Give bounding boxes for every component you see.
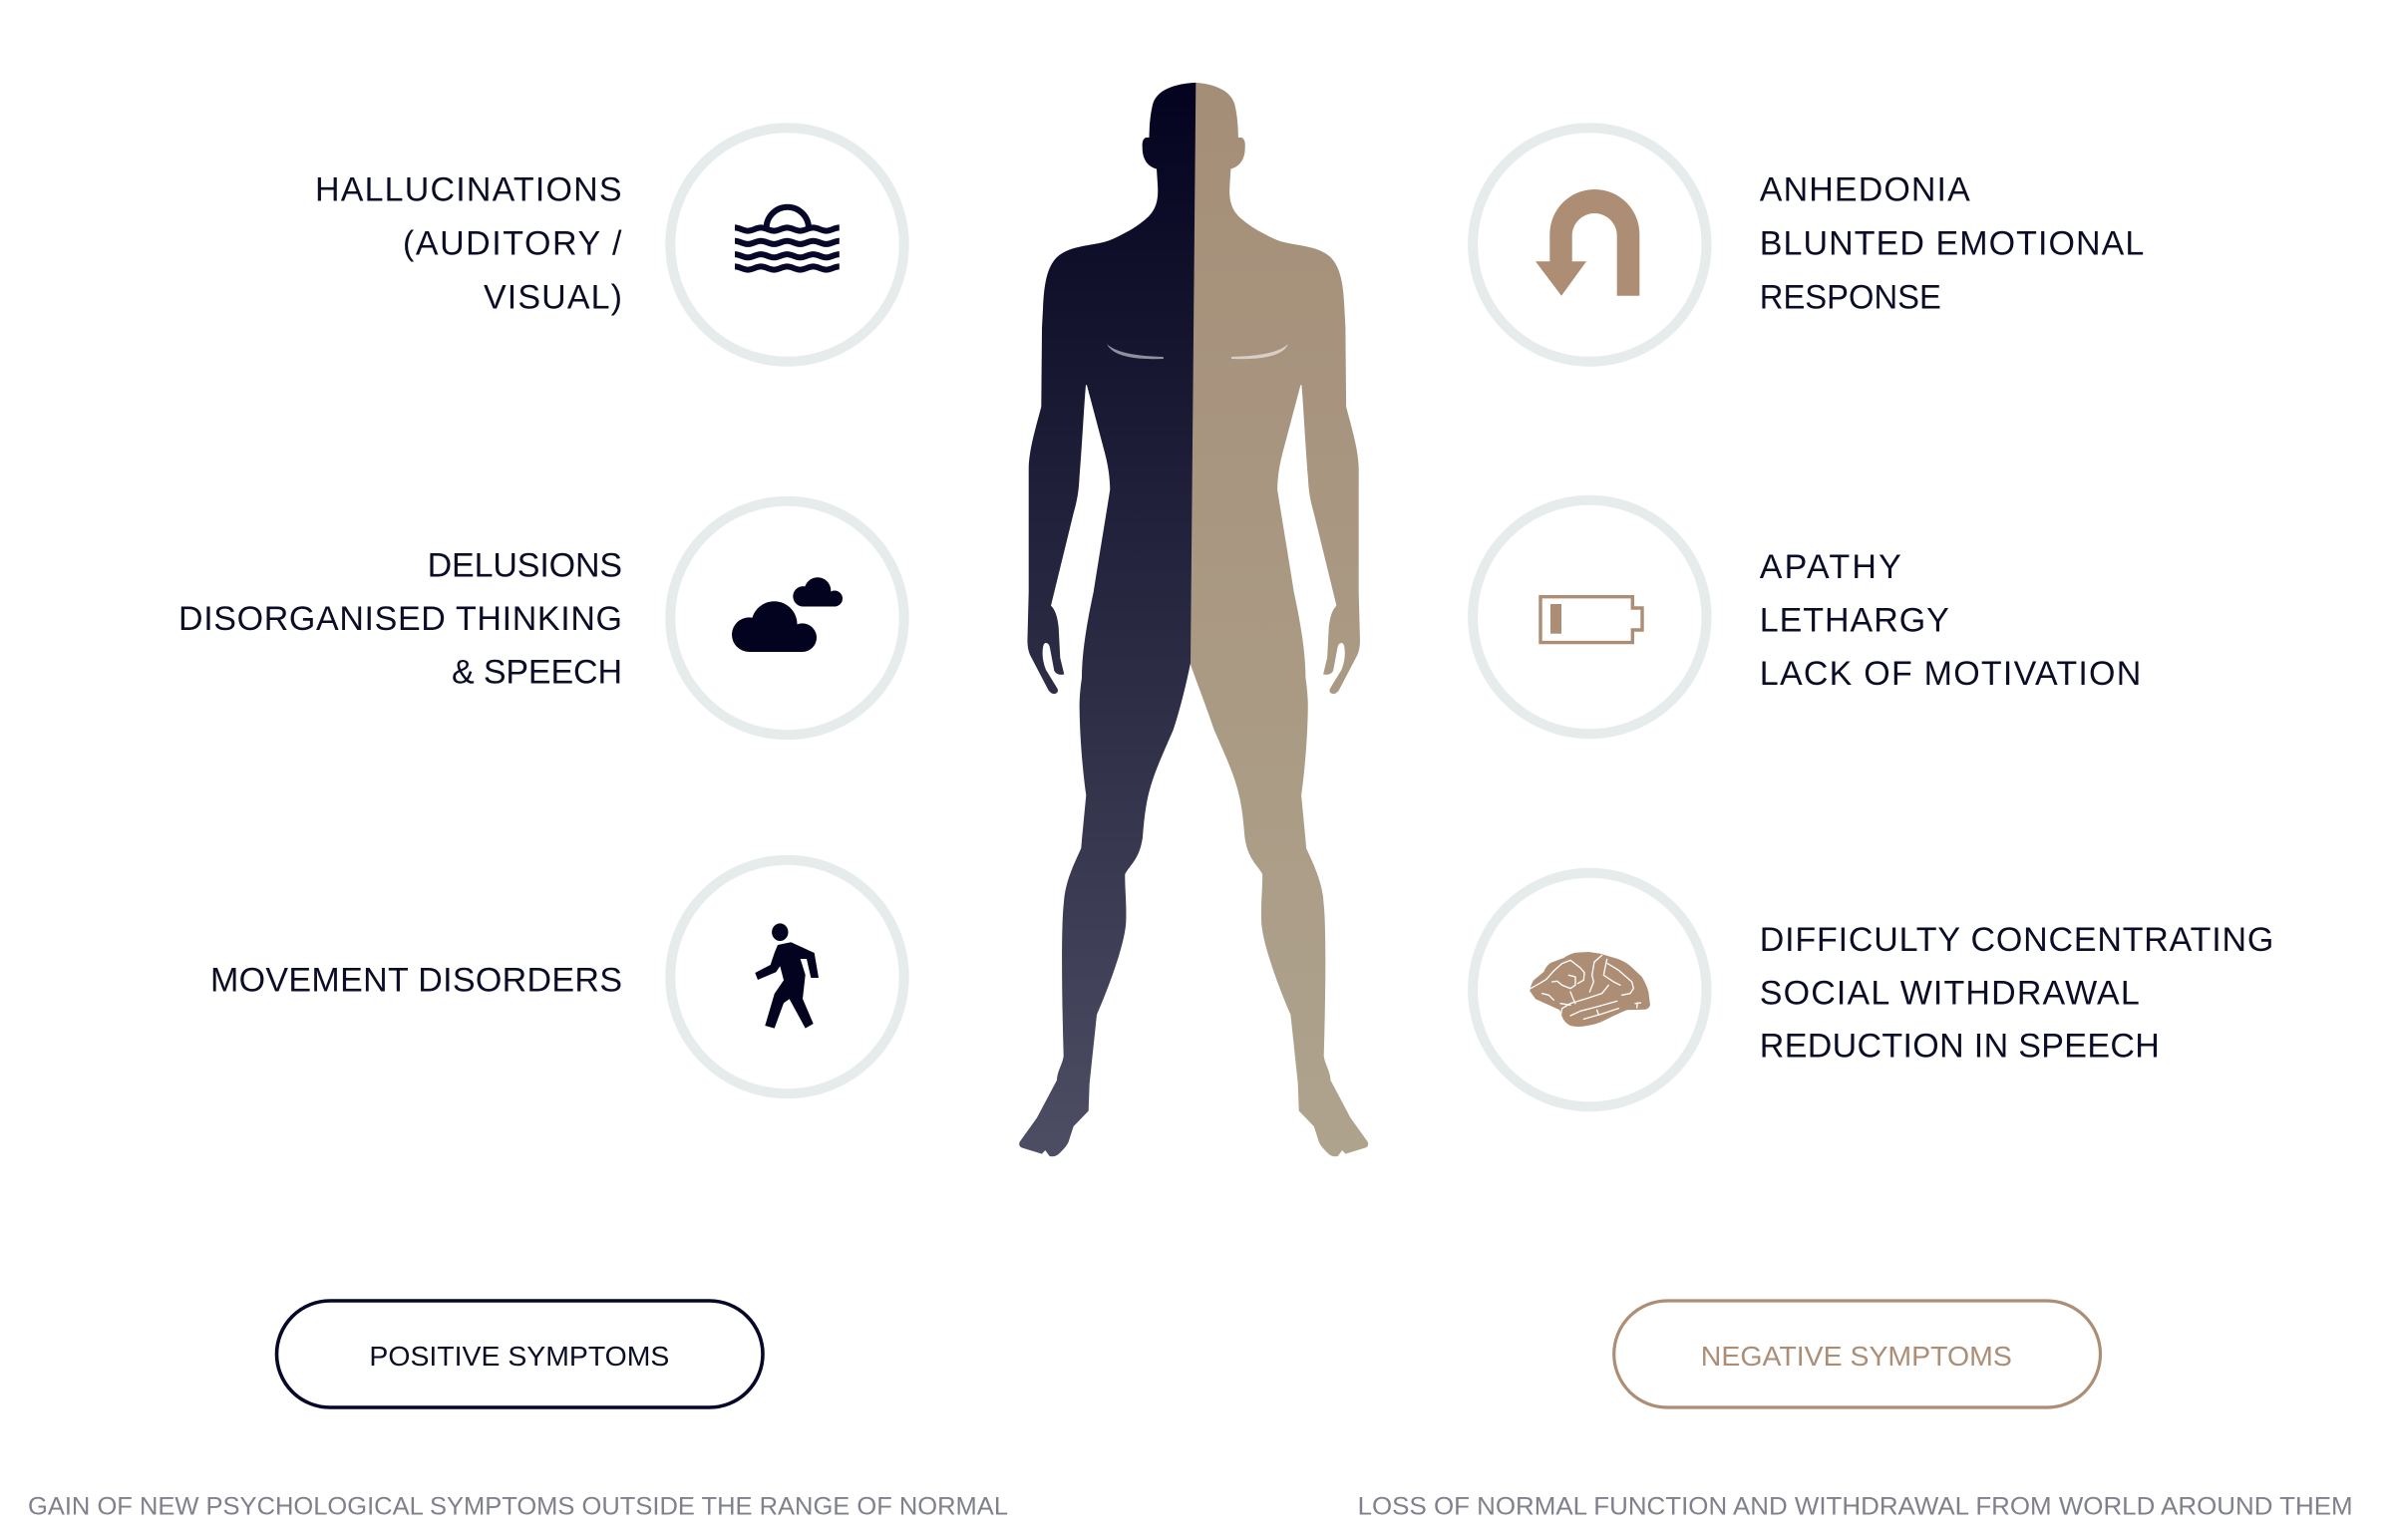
panel: hallucinations	[315, 128, 904, 362]
panel: movement disorders	[210, 860, 904, 1093]
icon: walking person	[755, 923, 819, 1029]
label: difficulty concentrating	[1760, 921, 2273, 1065]
label: hallucinations: HALLUCINATIONS	[315, 171, 622, 209]
label: difficulty concentrating: REDUCTION IN SPEECH	[1760, 1027, 2160, 1065]
right half of body	[1190, 83, 1368, 1156]
label: apathy	[1760, 548, 2141, 693]
icon ring: movement disorders	[670, 860, 904, 1093]
label: apathy: LETHARGY	[1760, 601, 1949, 639]
icon: u-turn arrow	[1536, 189, 1639, 296]
panel: apathy	[1473, 500, 2141, 734]
panel: delusions	[178, 501, 904, 735]
label: apathy: APATHY	[1760, 548, 1901, 586]
label: delusions	[178, 546, 622, 692]
left chest line	[1107, 344, 1164, 359]
label: anhedonia	[1760, 171, 2144, 316]
panel: difficulty concentrating	[1473, 873, 2273, 1106]
icon: clouds	[732, 577, 843, 652]
icon ring: delusions	[670, 501, 904, 735]
icon ring: anhedonia	[1473, 128, 1707, 362]
icon ring: hallucinations	[670, 128, 904, 362]
label: delusions: DISORGANISED THINKING	[178, 600, 622, 638]
label: hallucinations	[315, 171, 622, 316]
pill: negative symptoms	[1614, 1301, 2100, 1407]
legend: positive symptoms	[28, 1301, 1008, 1520]
pill: positive symptoms: POSITIVE SYMPTOMS	[369, 1341, 669, 1372]
left half of body	[1019, 83, 1196, 1156]
caption: positive: GAIN OF NEW PSYCHOLOGICAL SYMPTOMS OUTSIDE THE RANGE OF NORMAL	[28, 1492, 1008, 1520]
label: anhedonia: ANHEDONIA	[1760, 171, 1970, 209]
icon: brain	[1530, 952, 1650, 1027]
label: difficulty concentrating: SOCIAL WITHDRAWAL	[1760, 975, 2140, 1013]
label: movement disorders: MOVEMENT DISORDERS	[210, 962, 622, 1000]
human figure	[1019, 83, 1368, 1156]
right chest line	[1231, 344, 1288, 359]
label: anhedonia: RESPONSE	[1760, 278, 1941, 316]
icon ring: apathy	[1473, 500, 1707, 734]
label: hallucinations: VISUAL)	[484, 278, 622, 316]
legend: negative symptoms	[1358, 1301, 2353, 1520]
icon ring: difficulty concentrating	[1473, 873, 1707, 1106]
label: apathy: LACK OF MOTIVATION	[1760, 655, 2141, 693]
icon: low battery	[1540, 597, 1642, 643]
label: difficulty concentrating: DIFFICULTY CONCENTRATING	[1760, 921, 2273, 959]
panel: anhedonia	[1473, 128, 2144, 362]
label: hallucinations: (AUDITORY /	[403, 224, 622, 262]
pill: negative symptoms: NEGATIVE SYMPTOMS	[1701, 1341, 2012, 1372]
icon: sun over waves	[735, 207, 840, 270]
label: anhedonia: BLUNTED EMOTIONAL	[1760, 224, 2144, 262]
label: delusions: & SPEECH	[452, 654, 622, 692]
caption: negative: LOSS OF NORMAL FUNCTION AND WITHDRAWAL FROM WORLD AROUND THEM	[1358, 1492, 2353, 1520]
pill: positive symptoms	[277, 1301, 763, 1407]
label: delusions: DELUSIONS	[428, 546, 622, 584]
